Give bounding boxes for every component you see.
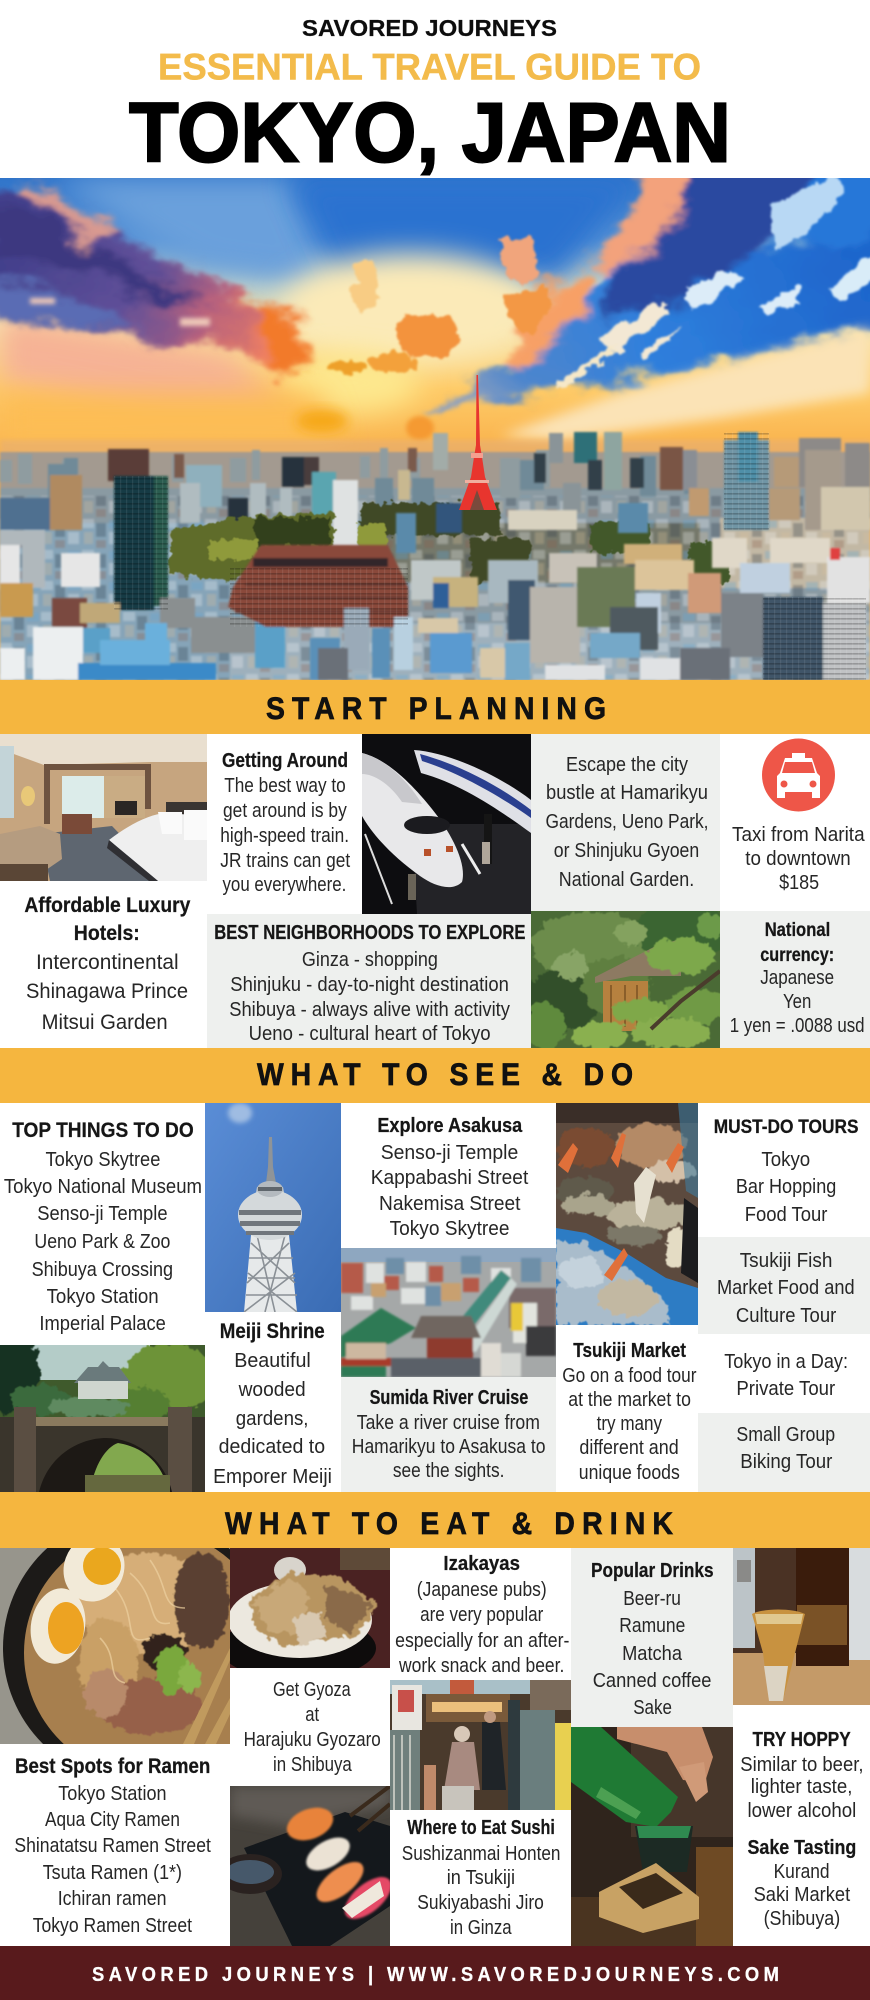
text: getting around body: The best way to xyxy=(224,775,346,797)
text: sake tasting list xyxy=(754,1861,851,1930)
title block xyxy=(129,15,731,180)
text: sake tasting list: (Shibuya) xyxy=(764,1908,840,1930)
tour card: biking: Small Group xyxy=(736,1424,835,1446)
panel: national currency xyxy=(720,911,870,1048)
text: top things list: Shibuya Crossing xyxy=(32,1259,173,1281)
text: Tsukiji body: different and xyxy=(579,1437,679,1459)
text: currency rate: Yen xyxy=(783,991,811,1013)
panel: escape the city: or Shinjuku Gyoen xyxy=(554,840,699,862)
text: Asakusa list xyxy=(371,1142,529,1240)
text: Tsukiji body: try many xyxy=(597,1413,662,1435)
text: sake tasting list: Saki Market xyxy=(754,1884,851,1906)
main title: TOKYO, JAPAN xyxy=(129,86,731,180)
heading: ramen spots: Best Spots for Ramen xyxy=(15,1755,210,1778)
text: drinks list xyxy=(593,1588,712,1719)
text: Meiji Shrine body: gardens, xyxy=(236,1408,308,1430)
tour card: bar hopping: Tokyo xyxy=(761,1149,810,1171)
text: Sumida body: see the sights. xyxy=(393,1460,504,1482)
left cloud xyxy=(0,178,311,375)
icon: taxi xyxy=(762,738,835,812)
panel: best neighborhoods xyxy=(207,914,531,1048)
text: hotel list: Intercontinental xyxy=(36,951,179,974)
heading: izakayas: Izakayas xyxy=(443,1553,520,1575)
text: ramen list: Aqua City Ramen xyxy=(45,1809,180,1831)
heading: currency: currency: xyxy=(760,945,834,966)
text: neighborhoods list: Shinjuku - day-to-night destination xyxy=(230,974,509,996)
text: Meiji Shrine body xyxy=(213,1350,332,1488)
text: Asakusa list: Kappabashi Street xyxy=(371,1167,529,1189)
text: hoppy body: lighter taste, xyxy=(751,1776,852,1798)
text: ramen list xyxy=(14,1783,211,1937)
photo: gyoza plate xyxy=(230,1548,390,1668)
text: drinks list: Canned coffee xyxy=(593,1670,712,1692)
tour card: bar hopping: Bar Hopping xyxy=(736,1176,836,1198)
Tokyo Tower xyxy=(459,375,497,510)
text: top things list: Imperial Palace xyxy=(39,1313,166,1335)
heading: Meiji Shrine: Meiji Shrine xyxy=(220,1320,325,1343)
text: top things list: Tokyo Skytree xyxy=(46,1149,160,1171)
city base xyxy=(0,452,870,680)
text: sushi list: in Tsukiji xyxy=(447,1867,515,1889)
text: ramen list: Tokyo Station xyxy=(58,1783,166,1805)
section band: what to see and do xyxy=(0,1048,870,1103)
text: neighborhoods list xyxy=(229,949,510,1045)
text: ramen list: Tsuta Ramen (1*) xyxy=(43,1862,182,1884)
panel: escape the city: Escape the city xyxy=(566,754,688,776)
text: neighborhoods list: Shibuya - always alive with activity xyxy=(229,999,510,1021)
text: drinks list: Sake xyxy=(633,1697,672,1719)
text: Tsukiji body: Go on a food tour xyxy=(562,1365,697,1387)
panel: izakayas xyxy=(390,1548,571,1680)
pink haze under left cloud xyxy=(0,313,290,421)
text: taxi fare xyxy=(732,824,865,894)
heading: top things: TOP THINGS TO DO xyxy=(12,1119,194,1142)
heading: hotels xyxy=(24,894,191,945)
text: Asakusa list: Senso-ji Temple xyxy=(381,1142,518,1164)
text: ramen list: Ichiran ramen xyxy=(58,1888,167,1910)
panel: get gyoza: at xyxy=(305,1704,319,1726)
tour card: Tokyo in a day: Private Tour xyxy=(736,1378,836,1400)
panel: taxi xyxy=(720,734,870,911)
text: hoppy body: Similar to beer, xyxy=(740,1754,864,1776)
panel: escape the city xyxy=(531,734,720,911)
heading: hotels: Hotels: xyxy=(74,922,140,945)
lower right cream streak xyxy=(500,328,870,440)
tour card: bar hopping: Food Tour xyxy=(745,1204,828,1226)
panel: popular drinks xyxy=(571,1548,733,1727)
text: sushi list: Sukiyabashi Jiro xyxy=(417,1892,544,1914)
text: currency rate xyxy=(730,967,865,1037)
panel: hotels xyxy=(0,881,207,1048)
panel: get gyoza: in Shibuya xyxy=(273,1754,353,1776)
text: Tsukiji body: unique foods xyxy=(579,1462,680,1484)
text: sushi list xyxy=(402,1843,560,1939)
tour card: Tokyo in a day xyxy=(698,1334,870,1413)
text: Asakusa list: Tokyo Skytree xyxy=(390,1218,510,1240)
text: izakayas body: (Japanese pubs) xyxy=(417,1579,547,1601)
photo: hotel room xyxy=(0,734,207,881)
panel: best spots for ramen xyxy=(0,1744,230,1946)
text: izakayas body xyxy=(395,1579,569,1677)
text: neighborhoods list: Ueno - cultural heart of Tokyo xyxy=(249,1023,491,1045)
panel: Meiji Shrine xyxy=(205,1312,341,1492)
panel: get gyoza xyxy=(230,1668,390,1786)
text: Meiji Shrine body: Emporer Meiji xyxy=(213,1466,332,1488)
panel: must-do tours xyxy=(698,1103,870,1492)
heading: currency: National xyxy=(765,920,830,941)
text: taxi fare: to downtown xyxy=(745,848,851,870)
tour card: Tsukiji fish market xyxy=(698,1237,870,1334)
text: top things list: Tokyo National Museum xyxy=(4,1176,202,1198)
text: izakayas body: work snack and beer. xyxy=(398,1655,564,1677)
photo: izakaya alley xyxy=(390,1680,571,1810)
text: drinks list: Ramune xyxy=(619,1615,685,1637)
heading: sushi: Where to Eat Sushi xyxy=(407,1817,555,1839)
panel: try hoppy and sake tasting xyxy=(733,1705,870,1946)
text: izakayas body: especially for an after- xyxy=(395,1630,569,1652)
text: izakayas body: are very popular xyxy=(420,1604,544,1626)
heading: try hoppy: TRY HOPPY xyxy=(752,1729,851,1751)
heading: Sumida: Sumida River Cruise xyxy=(370,1387,528,1409)
text: getting around body: you everywhere. xyxy=(222,874,346,896)
text: sushi list: Sushizanmai Honten xyxy=(402,1843,560,1865)
text: top things list: Tokyo Station xyxy=(47,1286,159,1308)
tour card: biking: Biking Tour xyxy=(740,1451,833,1473)
section band: start planning: START PLANNING xyxy=(266,692,606,726)
text: sake tasting list: Kurand xyxy=(774,1861,830,1883)
heading: Tsukiji Market: Tsukiji Market xyxy=(573,1340,686,1362)
tour card: bar hopping xyxy=(698,1103,870,1237)
section band: what to eat and drink: WHAT TO EAT & DRINK xyxy=(225,1507,673,1541)
panel: getting around xyxy=(207,734,362,914)
text: getting around body: high-speed train. xyxy=(220,825,349,847)
tour card: bar hopping: MUST-DO TOURS xyxy=(714,1117,858,1138)
text: currency rate: Japanese xyxy=(760,967,834,989)
panel: explore Asakusa xyxy=(341,1103,556,1248)
text: getting around body xyxy=(220,775,351,896)
text: top things list: Senso-ji Temple xyxy=(37,1203,168,1225)
text: hotel list: Shinagawa Prince xyxy=(26,980,188,1003)
text: Sumida body: Hamarikyu to Asakusa to xyxy=(352,1436,546,1458)
panel: Tsukiji Market xyxy=(556,1325,698,1492)
heading: neighborhoods: BEST NEIGHBORHOODS TO EXPLORE xyxy=(214,922,525,944)
panel: Sumida River Cruise xyxy=(341,1377,556,1492)
panel: get gyoza: Get Gyoza xyxy=(273,1679,351,1701)
photo: Asakusa Nakamise street xyxy=(341,1248,556,1377)
photo: Imperial Palace bridge xyxy=(0,1345,205,1492)
text: ramen list: Shinatatsu Ramen Street xyxy=(14,1835,211,1857)
footer: SAVORED JOURNEYS | WWW.SAVOREDJOURNEYS.COM xyxy=(92,1964,779,1986)
section band: what to see and do: WHAT TO SEE & DO xyxy=(257,1058,633,1092)
panel: escape the city: National Garden. xyxy=(559,869,694,891)
text: hotel list xyxy=(26,951,188,1034)
text: Sumida body: Take a river cruise from xyxy=(357,1412,540,1434)
text: taxi fare: Taxi from Narita xyxy=(732,824,865,846)
panel: where to eat sushi xyxy=(390,1810,571,1946)
text: drinks list: Beer-ru xyxy=(623,1588,681,1610)
heading: Asakusa: Explore Asakusa xyxy=(377,1115,523,1137)
panel: escape the city: bustle at Hamarikyu xyxy=(546,782,708,804)
tour card: Tsukiji fish market: Market Food and xyxy=(717,1277,855,1299)
subtitle: ESSENTIAL TRAVEL GUIDE TO xyxy=(158,46,701,88)
panel: top things to do xyxy=(0,1103,205,1345)
park xyxy=(169,503,730,583)
buildings foreground xyxy=(0,476,870,680)
text: neighborhoods list: Ginza - shopping xyxy=(302,949,438,971)
brand line: SAVORED JOURNEYS xyxy=(302,15,557,41)
text: ramen list: Tokyo Ramen Street xyxy=(33,1915,192,1937)
text: top things list xyxy=(4,1149,202,1335)
section band: start planning xyxy=(0,680,870,734)
heading: hotels: Affordable Luxury xyxy=(24,894,191,917)
photo: sake being poured xyxy=(571,1727,733,1946)
photo: ramen bowl xyxy=(0,1548,230,1744)
footer xyxy=(0,1946,870,2000)
tour card: Tokyo in a day: Tokyo in a Day: xyxy=(724,1351,848,1373)
panel: get gyoza: Harajuku Gyozaro xyxy=(244,1729,381,1751)
tour card: biking xyxy=(698,1413,870,1492)
text: top things list: Ueno Park & Zoo xyxy=(34,1231,170,1253)
tour card: Tsukiji fish market: Culture Tour xyxy=(736,1305,837,1327)
text: hoppy body: lower alcohol xyxy=(748,1800,856,1822)
photo: hoppy bottle and glass xyxy=(733,1548,870,1705)
text: Tsukiji body: at the market to xyxy=(568,1389,691,1411)
heading: currency xyxy=(760,920,834,966)
text: drinks list: Matcha xyxy=(622,1643,683,1665)
photo: sushi on slate xyxy=(230,1786,390,1946)
text: taxi fare: $185 xyxy=(779,872,819,894)
section band: what to eat and drink xyxy=(0,1492,870,1548)
heading: getting around: Getting Around xyxy=(222,750,348,772)
text: getting around body: JR trains can get xyxy=(220,850,351,872)
right cloud xyxy=(433,158,870,411)
text: Sumida body xyxy=(352,1412,546,1482)
text: Asakusa list: Nakemisa Street xyxy=(379,1193,521,1215)
photo: Tsukiji market seafood xyxy=(556,1103,698,1325)
heading: drinks: Popular Drinks xyxy=(591,1560,714,1582)
text: hotel list: Mitsui Garden xyxy=(42,1011,168,1034)
text: hoppy body xyxy=(740,1754,864,1822)
text: Meiji Shrine body: wooded xyxy=(238,1379,306,1401)
text: Tsukiji body xyxy=(562,1365,697,1484)
panel: escape the city: Gardens, Ueno Park, xyxy=(546,811,708,833)
hero photo: Tokyo skyline at sunset xyxy=(0,178,870,680)
text: Meiji Shrine body: dedicated to xyxy=(219,1436,325,1458)
photo: Tokyo Skytree xyxy=(205,1103,341,1312)
photo: bullet trains xyxy=(362,734,531,914)
photo: Japanese garden xyxy=(531,911,720,1048)
text: Meiji Shrine body: Beautiful xyxy=(234,1350,311,1372)
heading: sake tasting: Sake Tasting xyxy=(748,1837,856,1859)
text: sushi list: in Ginza xyxy=(450,1917,512,1939)
tour card: Tsukiji fish market: Tsukiji Fish xyxy=(740,1250,832,1272)
text: getting around body: get around is by xyxy=(223,800,347,822)
